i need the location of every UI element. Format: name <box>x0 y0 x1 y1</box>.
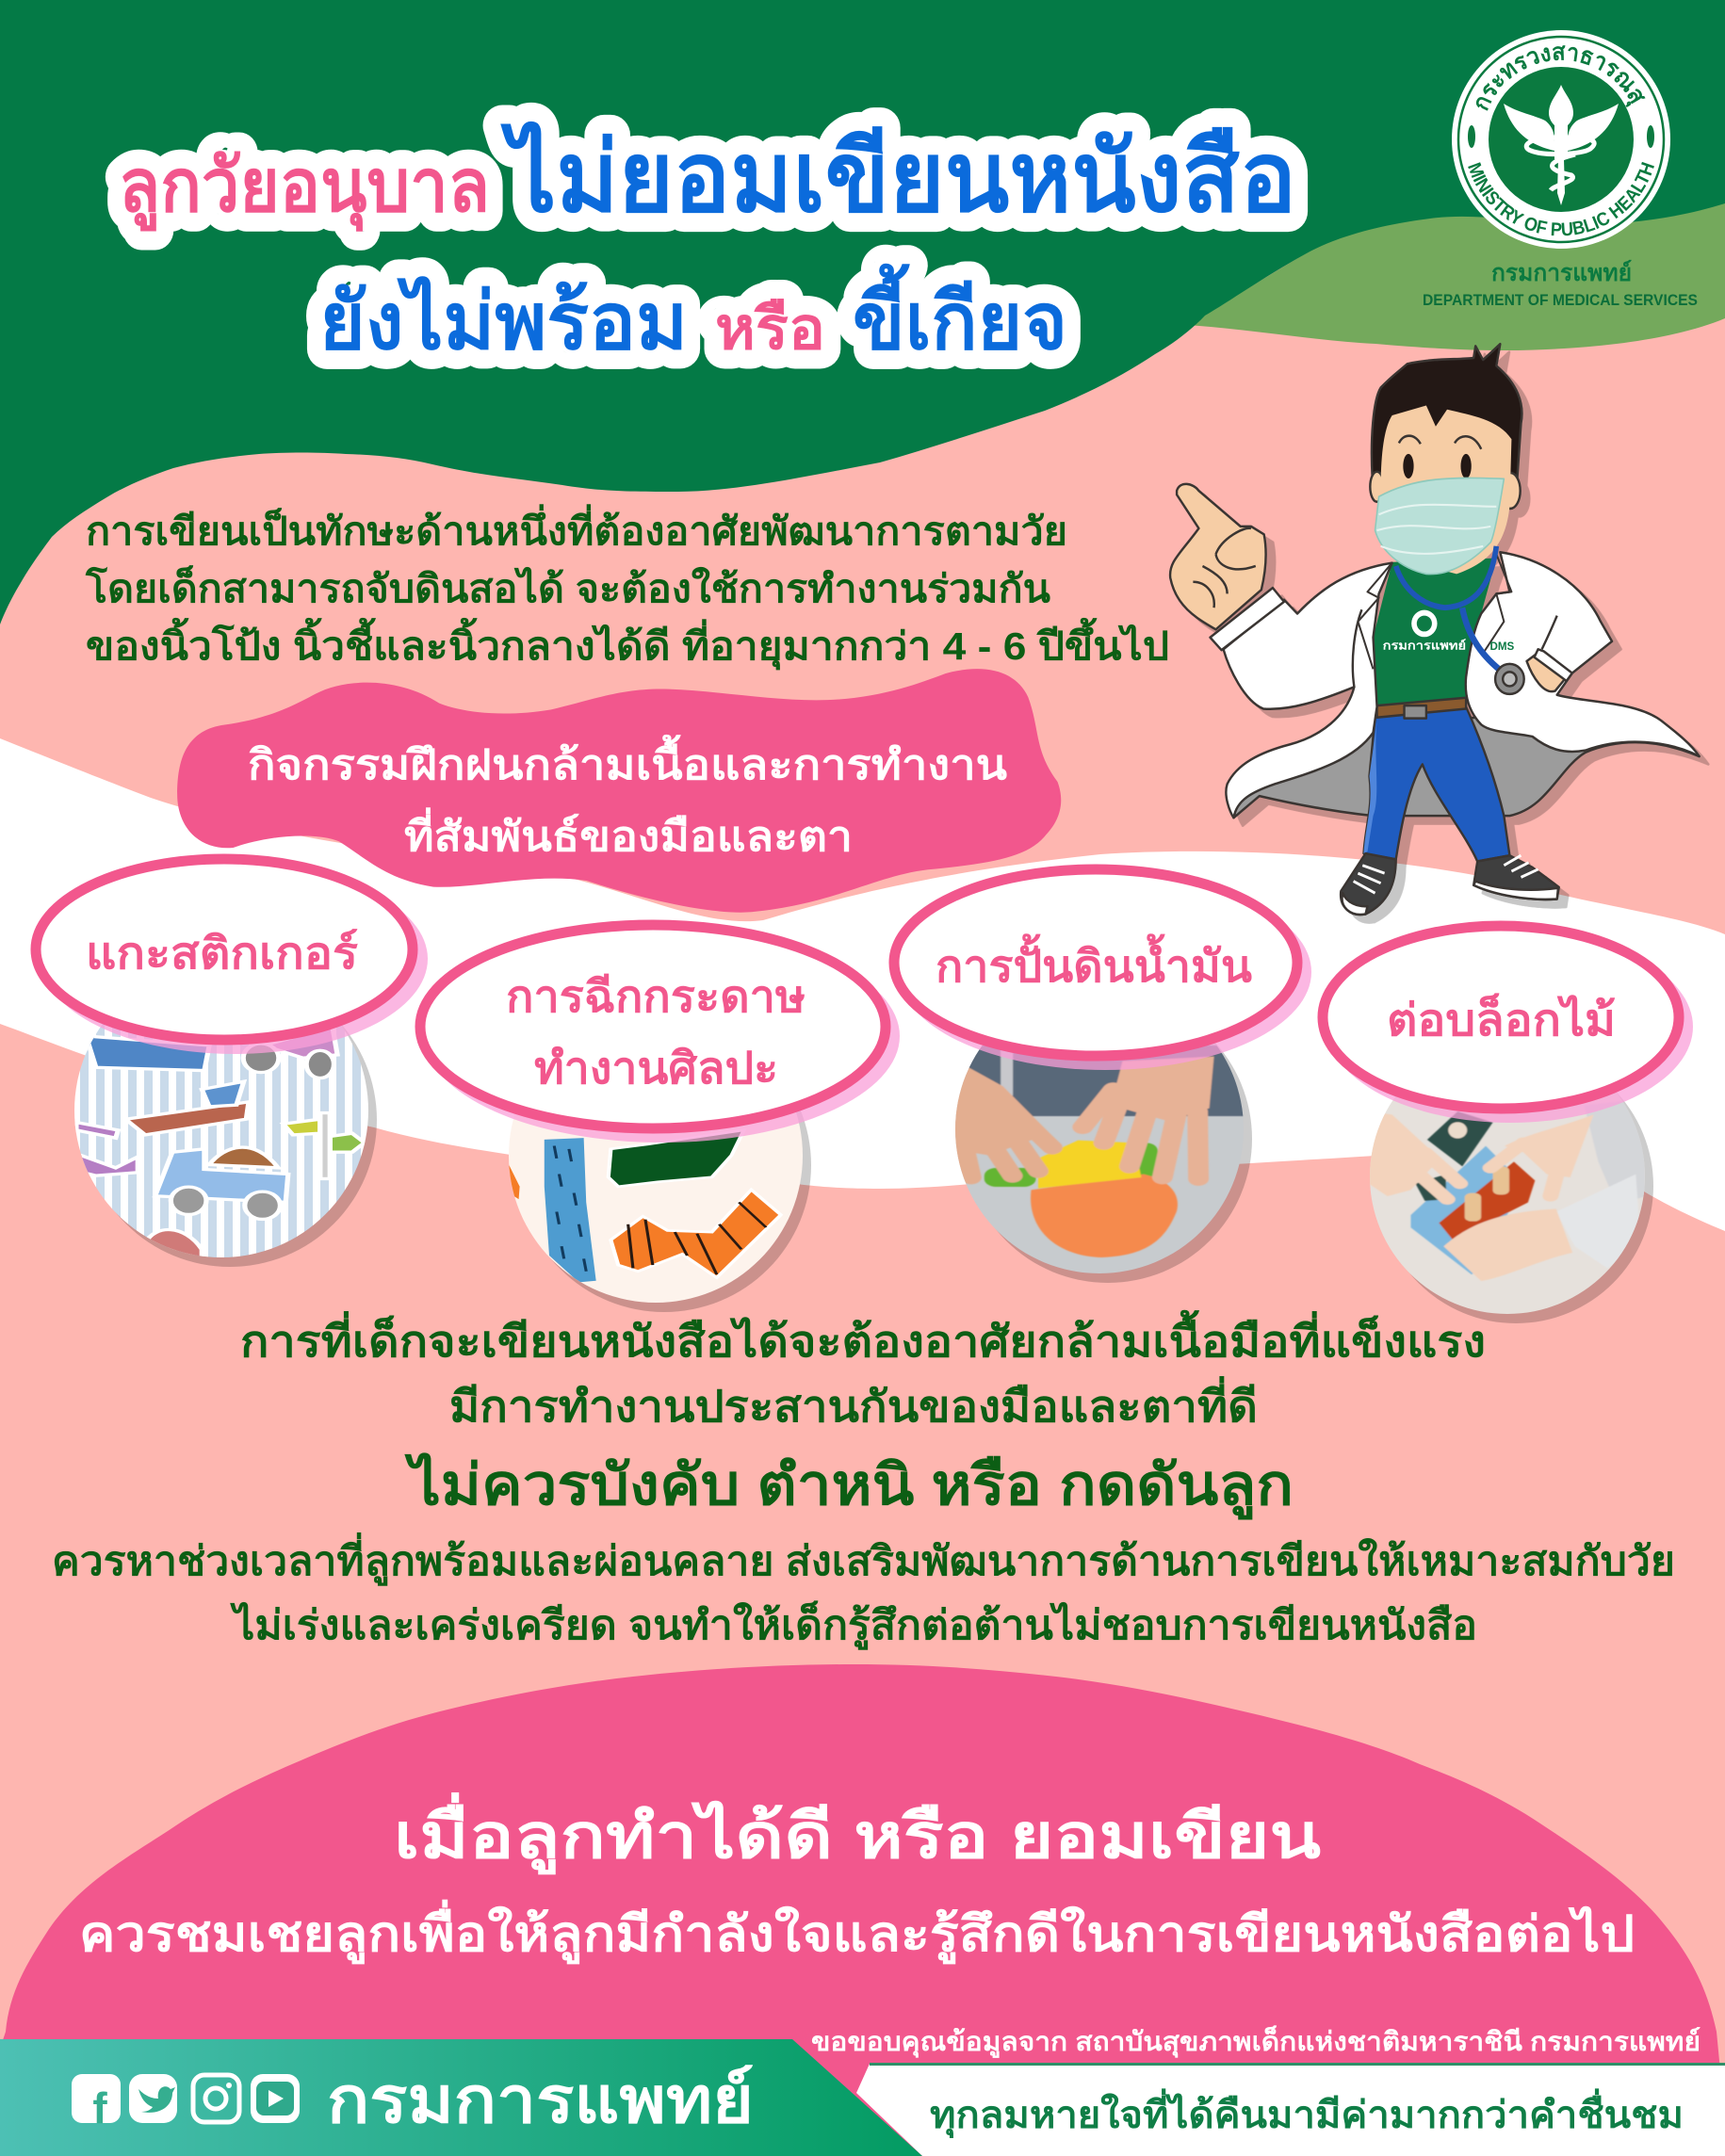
stethoscope <box>1396 546 1496 608</box>
right shoe <box>1473 855 1559 900</box>
department name: DEPARTMENT OF MEDICAL SERVICES <box>1423 291 1698 309</box>
footer banner: white slogan panel <box>856 2063 1725 2156</box>
activity heading blob: กิจกรรมฝึกฝนกล้ามเนื้อและการทำงาน <box>248 734 1007 788</box>
logo: Ministry of Public Health seal <box>1452 30 1670 249</box>
activity 3: modelling clay picture <box>955 1044 1252 1283</box>
left shoe <box>1341 853 1396 915</box>
icon: instagram <box>193 2075 239 2122</box>
icon: youtube <box>251 2074 300 2123</box>
icon: facebook: f <box>92 2083 107 2132</box>
face mask <box>1375 478 1504 575</box>
coat badge: DMS <box>1489 641 1515 653</box>
icon: twitter <box>129 2074 177 2123</box>
lapels <box>1358 554 1511 669</box>
activity heading blob: ที่สัมพันธ์ของมือและตา <box>404 807 853 860</box>
title line 1 blue: ไม่ยอมเขียนหนังสือ <box>499 122 1296 233</box>
intro paragraph <box>85 504 1169 671</box>
ears <box>1370 472 1384 502</box>
title line 2 blue: ยังไม่พร้อม <box>319 276 688 365</box>
pointing hand <box>1170 484 1266 629</box>
cuff left <box>1211 588 1284 650</box>
icon: facebook <box>72 2074 121 2132</box>
activity 4 bubble: ต่อบล็อกไม้ <box>1387 992 1616 1045</box>
intro paragraph: โดยเด็กสามารถจับดินสอได้ จะต้องใช้การทำงานร่วมกัน <box>85 565 1050 610</box>
activity 3 bubble: การปั้นดินน้ำมัน <box>936 933 1252 991</box>
activity 2 bubble: การฉีกกระดาษ <box>506 971 806 1021</box>
social icons <box>72 2074 300 2132</box>
hand on hip <box>1527 651 1567 691</box>
praise body: ควรชมเชยลูกเพื่อให้ลูกมีกำลังใจและรู้สึกดีในการเขียนหนังสือต่อไป <box>79 1900 1635 1965</box>
coat right sleeve, panel and tail <box>1466 552 1700 756</box>
coat left sleeve and panel <box>1224 563 1392 818</box>
trousers <box>1363 706 1509 862</box>
activity 3 bubble <box>894 869 1311 1070</box>
head hair <box>1372 344 1522 478</box>
activity 2 bubble: ทำงานศิลปะ <box>534 1043 778 1093</box>
title line 2 blue end: ขี้เกียจ <box>853 263 1067 365</box>
title line 2 pink: หรือ <box>715 297 825 362</box>
shirt emblem <box>1411 610 1438 637</box>
logo: Ministry of Public Health seal: MINISTRY OF PUBLIC HEALTH <box>1468 162 1654 235</box>
advice line 2: มีการทำงานประสานกันของมือและตาที่ดี <box>449 1376 1258 1431</box>
activity 1: sticker picture <box>74 1025 377 1267</box>
advice emphasis: ไม่ควรบังคับ ตำหนิ หรือ กดดันลูก <box>403 1451 1294 1520</box>
activity 1 bubble: แกะสติกเกอร์ <box>86 928 358 978</box>
department name: กรมการแพทย์ <box>1491 259 1632 286</box>
activity 2 bubble <box>420 925 900 1143</box>
cape grey lining <box>1233 717 1700 818</box>
activity heading blob <box>177 669 1061 913</box>
footer department name: กรมการแพทย์ <box>327 2065 754 2136</box>
activity 4 bubble <box>1323 926 1693 1123</box>
title <box>119 122 1296 365</box>
advice text <box>52 1309 1675 1650</box>
advice line 3: ควรหาช่วงเวลาที่ลูกพร้อมและผ่อนคลาย ส่งเสริมพัฒนาการด้านการเขียนให้เหมาะสมกับวัย <box>52 1532 1675 1586</box>
doctor mascot <box>1170 344 1700 915</box>
background: dark green header shape <box>0 0 1725 624</box>
shirt text: กรมการแพทย์ <box>1383 638 1466 652</box>
background: white wave band <box>0 738 1725 1231</box>
eyebrows <box>1399 436 1481 449</box>
pink dome: praise message <box>0 1664 1725 2156</box>
footer banner: white slogan panel: ทุกลมหายใจที่ได้คืนมามีค่ามากกว่าคำชื่นชม <box>930 2088 1684 2139</box>
face <box>1381 405 1511 574</box>
title line 1 pink: ลูกวัยอนุบาล <box>119 144 490 232</box>
belt <box>1377 698 1466 718</box>
praise headline: เมื่อลูกทำได้ดี หรือ ยอมเขียน <box>394 1791 1321 1875</box>
intro paragraph: การเขียนเป็นทักษะด้านหนึ่งที่ต้องอาศัยพัฒนาการตามวัย <box>86 504 1067 553</box>
activity 4: wooden blocks picture <box>1370 1093 1653 1323</box>
eyes <box>1403 454 1472 478</box>
background: light green wave <box>1187 188 1725 350</box>
advice line 1: การที่เด็กจะเขียนหนังสือได้จะต้องอาศัยกล้ามเนื้อมือที่แข็งแรง <box>240 1309 1486 1366</box>
green shirt <box>1374 559 1496 706</box>
intro paragraph: ของนิ้วโป้ง นิ้วชี้และนิ้วกลางได้ดี ที่อายุมากกว่า 4 - 6 ปีขึ้นไป <box>86 618 1169 671</box>
trouser highlight <box>1363 721 1377 853</box>
credit line: ขอขอบคุณข้อมูลจาก สถาบันสุขภาพเด็กแห่งชาติมหาราชินี กรมการแพทย์ <box>811 2025 1701 2058</box>
department name <box>1423 259 1698 309</box>
advice line 4: ไม่เร่งและเคร่งเครียด จนทำให้เด็กรู้สึกต่อต้านไม่ชอบการเขียนหนังสือ <box>230 1600 1477 1650</box>
activity 1 bubble <box>36 859 428 1054</box>
footer banner: teal gradient <box>0 2039 922 2156</box>
activity 2: torn paper picture <box>509 1111 811 1312</box>
